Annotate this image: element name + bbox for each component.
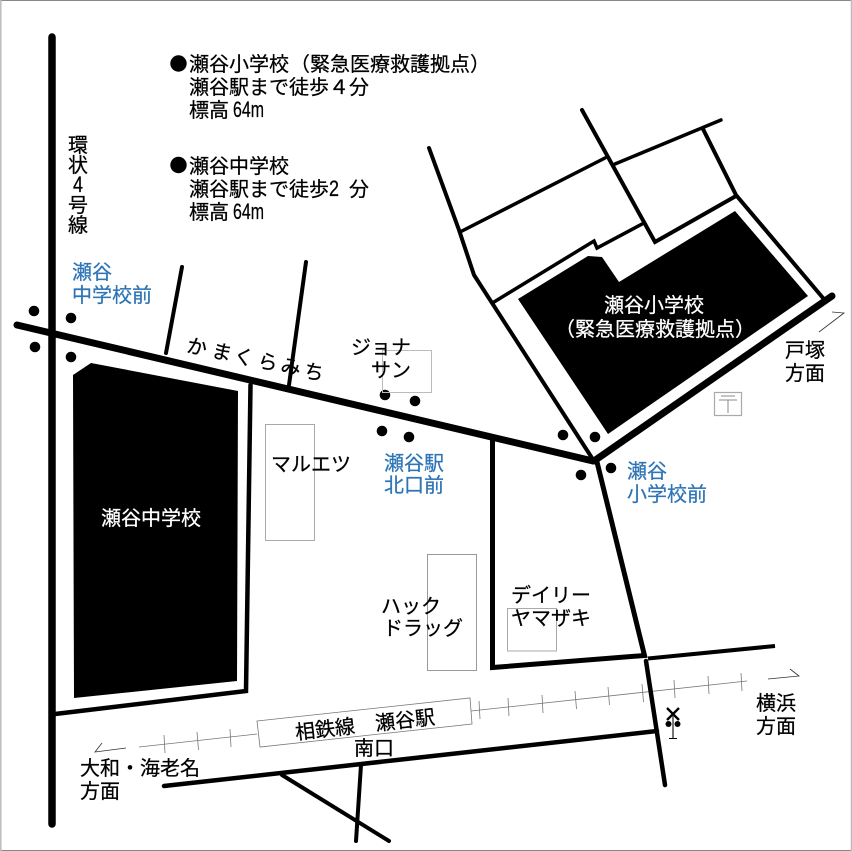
- school info: elementary school: 分: [349, 76, 369, 99]
- label: loop route 4: 号: [68, 195, 88, 217]
- station: Sotetsu line Seya station: [257, 698, 472, 747]
- railway line with ties: [139, 673, 747, 753]
- label: toward Yokohama: 方面: [756, 715, 796, 738]
- store: Maruetsu: マルエツ: [271, 454, 351, 476]
- label: south exit: 南口: [354, 737, 394, 760]
- school info: junior high school: 標高: [189, 201, 229, 224]
- arrow: toward Totsuka: [819, 312, 844, 332]
- label: bus stop Seya elementary school: [627, 460, 707, 506]
- street block around junior high school: [55, 385, 250, 714]
- label: Kamakura road: く: [232, 345, 256, 371]
- building: Seya elementary school: （緊急医療救護拠点）: [555, 318, 755, 341]
- label: bus stop Seya station north exit: 瀬谷駅: [384, 452, 444, 475]
- school info: elementary school: 標高: [189, 99, 229, 122]
- store: Jonathan's: ジョナ: [351, 337, 411, 359]
- label: Kamakura road: ち: [302, 360, 326, 386]
- school info: elementary school: 64m: [233, 97, 264, 122]
- label: loop route 4: [68, 135, 88, 237]
- station block streets: [492, 437, 775, 785]
- school info: elementary school: 瀬谷駅まで徒歩: [189, 76, 329, 99]
- label: toward Totsuka: 方面: [785, 362, 825, 385]
- label: bus stop Seya junior high school: 瀬谷: [72, 261, 112, 284]
- label: bus stop Seya elementary school: 瀬谷: [627, 460, 667, 483]
- label: loop route 4: 状: [68, 154, 88, 177]
- label: toward Yamato and Ebina: [80, 757, 200, 803]
- icon: post office: [714, 392, 742, 416]
- label: bus stop Seya station north exit: 北口前: [384, 474, 444, 497]
- school info: junior high school: 瀬谷駅まで徒歩: [189, 178, 329, 201]
- label: bus stop Seya junior high school: 中学校前: [72, 284, 152, 307]
- label: toward Yamato and Ebina: 大和・海老名: [80, 757, 200, 780]
- label: toward Yokohama: 横浜: [756, 692, 796, 715]
- school info: elementary school: [170, 53, 490, 122]
- school info: junior high school: 瀬谷中学校: [189, 155, 289, 178]
- label: bus stop Seya station north exit: [384, 452, 444, 497]
- store: Hac Drug: ドラッグ: [383, 617, 463, 640]
- label: Kamakura road: ら: [256, 350, 280, 376]
- station: Sotetsu line Seya station: 相鉄線: [294, 715, 356, 744]
- label: bus stop Seya elementary school: 小学校前: [627, 483, 707, 506]
- road: Kamakura road: [17, 325, 593, 461]
- school info: elementary school: 瀬谷小学校: [189, 53, 289, 76]
- school info: elementary school: ４: [329, 77, 349, 99]
- label: toward Yokohama: [756, 692, 796, 738]
- arrow: toward Yamato and Ebina: [95, 743, 126, 752]
- building: Seya junior high school: 瀬谷中学校: [101, 507, 201, 530]
- building: Seya elementary school: [518, 211, 808, 434]
- road: loop route 4: [48, 37, 56, 824]
- label: loop route 4: 環: [68, 135, 88, 157]
- label: Kamakura road: み: [279, 355, 303, 381]
- store: Maruetsu: [266, 424, 351, 540]
- side streets north of Kamakura road: [166, 262, 306, 385]
- streets around elementary school: [429, 110, 823, 458]
- icon: railway crossing: [666, 708, 680, 738]
- label: loop route 4: 4: [73, 172, 83, 197]
- label: Kamakura road: [185, 335, 326, 386]
- label: Kamakura road: ま: [210, 340, 234, 366]
- bus stop dots: [29, 306, 616, 480]
- school info: junior high school: [170, 155, 369, 224]
- label: toward Yamato and Ebina: 方面: [80, 780, 120, 803]
- label: Kamakura road: か: [185, 335, 209, 361]
- label: loop route 4: 線: [68, 214, 88, 237]
- store: Daily Yamazaki: ヤマザキ: [511, 608, 591, 630]
- label: toward Totsuka: [785, 339, 825, 385]
- building: Seya junior high school: [73, 363, 238, 698]
- store: Daily Yamazaki: [508, 584, 591, 651]
- store: Hac Drug: [381, 554, 476, 670]
- school info: junior high school: 64m: [233, 199, 264, 224]
- arrow: toward Yokohama: [768, 669, 799, 679]
- store: Jonathan's: [351, 337, 432, 392]
- station: Sotetsu line Seya station: 瀬谷駅: [374, 706, 436, 735]
- building: Seya elementary school: 瀬谷小学校: [604, 294, 704, 317]
- school info: junior high school: 2: [329, 176, 339, 201]
- school info: junior high school: 分: [349, 178, 369, 201]
- store: Hac Drug: ハック: [381, 595, 441, 618]
- school info: elementary school: （緊急医療救護拠点）: [290, 53, 490, 76]
- store: Daily Yamazaki: デイリー: [511, 584, 591, 607]
- road: toward Totsuka: [594, 296, 832, 461]
- label: bus stop Seya junior high school: [72, 261, 152, 307]
- label: toward Totsuka: 戸塚: [785, 339, 825, 362]
- store: Jonathan's: サン: [371, 360, 411, 382]
- south exit streets: [164, 731, 657, 841]
